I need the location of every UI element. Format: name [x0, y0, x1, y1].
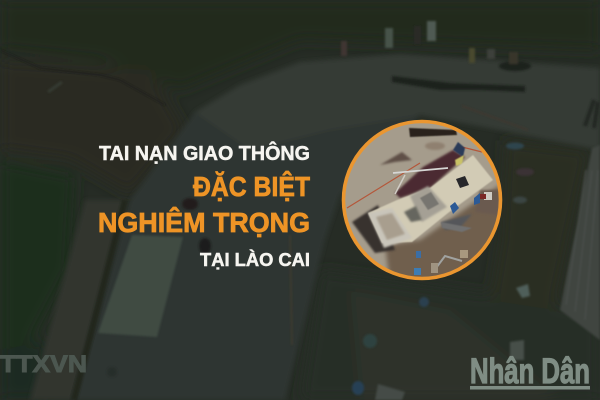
debris at right of bus: [478, 188, 498, 206]
metal frame: [441, 222, 472, 232]
road: [74, 54, 600, 400]
heading line 3: NGHIÊM TRỌNG: [98, 207, 310, 238]
circular photo: wrecked bus: [340, 118, 505, 283]
pale concrete slab: [98, 235, 183, 337]
red rope: [347, 147, 482, 208]
title text block: [98, 141, 310, 270]
seats and interior: [395, 150, 465, 198]
watermark: TTXVN: TTXVN: [0, 351, 87, 378]
bus roof: [368, 155, 493, 243]
building on the right edge: [560, 145, 600, 340]
blue debris: [416, 251, 421, 258]
dark burn mark: [409, 128, 457, 137]
ground: [345, 123, 498, 270]
orange ring: [344, 122, 500, 278]
heading line 2: ĐẶC BIỆT: [193, 171, 310, 202]
roof hatch: [456, 176, 469, 188]
heading line 4: TẠI LÀO CAI: [200, 249, 310, 270]
burnt front of bus: [368, 208, 412, 248]
sidewalk along the road: [30, 200, 128, 400]
left dark wreck section: [352, 205, 395, 253]
heading line 1: TAI NẠN GIAO THÔNG: [99, 141, 310, 165]
road gutter: [74, 200, 125, 400]
